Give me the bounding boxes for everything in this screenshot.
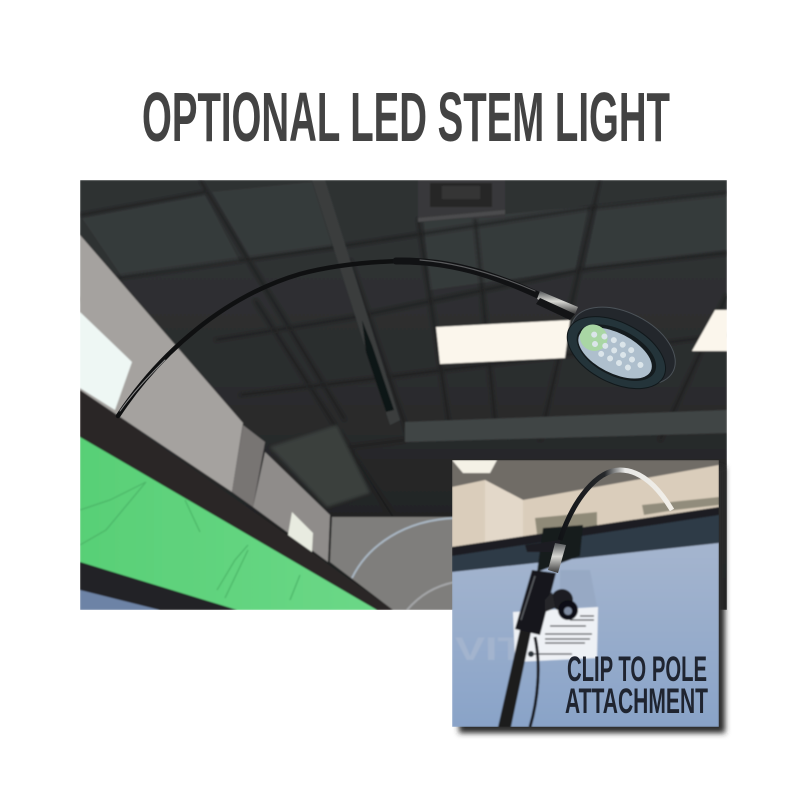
inset caption bbox=[565, 650, 708, 721]
warning label bbox=[513, 570, 598, 662]
knob bbox=[545, 589, 578, 620]
green graphic panel bbox=[80, 437, 377, 610]
window bbox=[80, 312, 132, 410]
ceiling vent bbox=[418, 180, 505, 222]
back wall bbox=[330, 517, 460, 610]
inset photo: clip to pole attachment bbox=[452, 460, 719, 727]
reflection arcs bbox=[352, 518, 455, 578]
left wall bbox=[80, 235, 243, 492]
small window bbox=[288, 512, 313, 552]
top clip bbox=[537, 525, 583, 572]
duct bbox=[270, 425, 370, 507]
ceiling tile grid bbox=[80, 180, 727, 520]
pole bbox=[498, 630, 531, 727]
side wall bbox=[253, 452, 330, 562]
inset rail bbox=[452, 507, 719, 572]
lower rail bbox=[81, 576, 230, 610]
cable bbox=[530, 637, 538, 727]
display top rail bbox=[80, 390, 393, 610]
clamp body bbox=[515, 570, 556, 635]
inset ceiling light bbox=[452, 460, 497, 473]
ceiling band bbox=[405, 410, 727, 442]
inset caption: ATTACHMENT bbox=[565, 682, 708, 721]
ceiling lights bbox=[436, 320, 570, 364]
faint panel graphic bbox=[80, 482, 300, 600]
wall column bbox=[232, 425, 265, 507]
faint panel lettering: VIT bbox=[455, 631, 526, 667]
inset back wall bbox=[452, 465, 719, 547]
inset blue panel bbox=[452, 540, 719, 727]
curved stem bbox=[560, 470, 672, 540]
inset windows bbox=[535, 512, 597, 534]
lower blue panel bbox=[80, 590, 160, 610]
inset drop shadow bbox=[459, 467, 725, 733]
infographic canvas bbox=[80, 92, 730, 738]
lighter ceiling tiles bbox=[82, 182, 727, 290]
LED array bbox=[578, 328, 652, 378]
silver ferrule bbox=[548, 543, 566, 573]
stem arm bbox=[118, 260, 540, 416]
ceiling beam bbox=[312, 180, 400, 425]
stem connector bbox=[536, 291, 578, 320]
main photo: LED stem light against ceiling bbox=[80, 180, 727, 610]
lamp head bbox=[566, 306, 676, 389]
